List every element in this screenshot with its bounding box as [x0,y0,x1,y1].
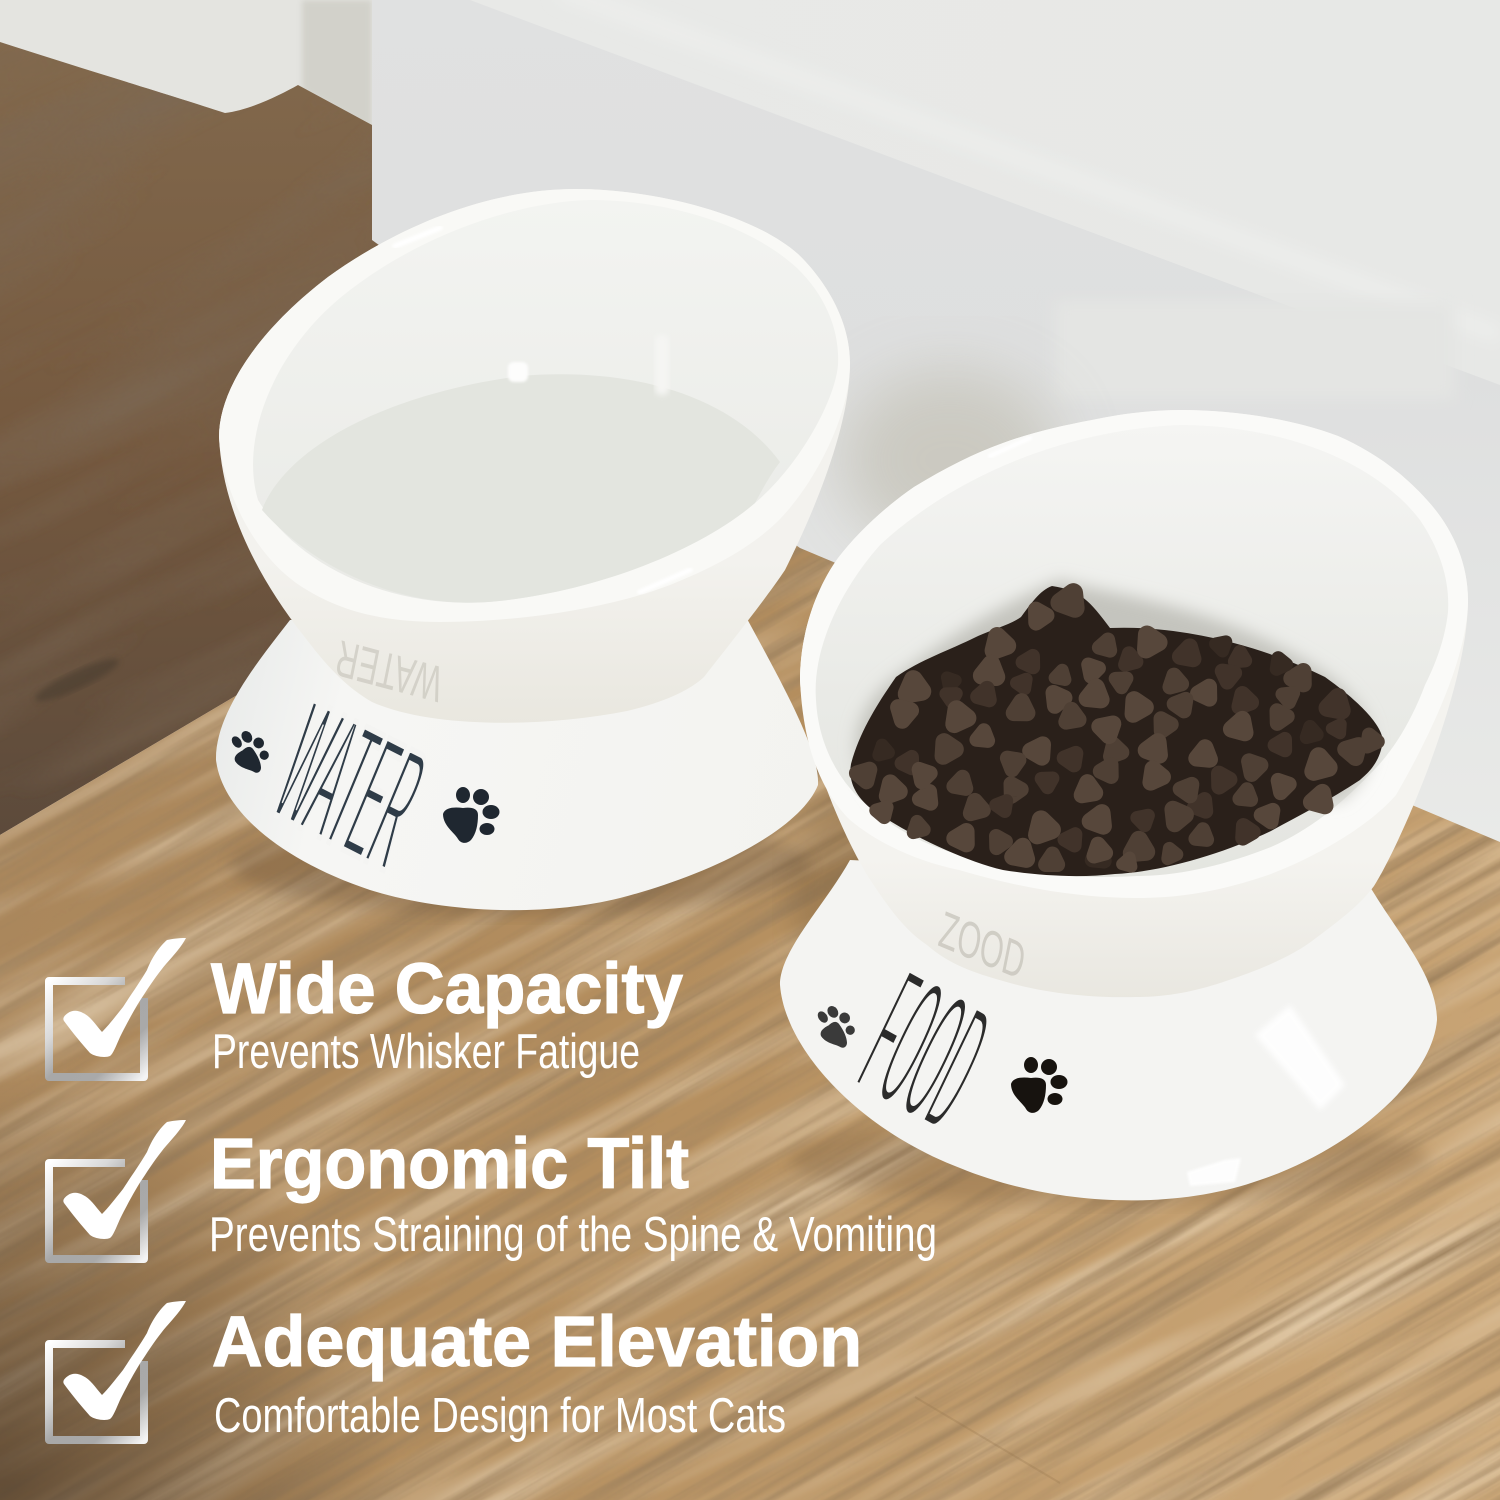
rim highlight [990,438,1030,456]
food bowl body [800,410,1468,997]
water bowl [216,189,850,915]
food bowl base [780,860,1437,1200]
water bowl body [219,189,850,723]
upper dark plank [0,42,379,835]
upper wall above the baseboard [470,0,1500,385]
white wall and baseboard [372,0,1500,842]
ghost label seen through ceramic: WATER [331,629,447,713]
feature: wide capacity [49,938,683,1079]
feature: adequate elevation [49,1301,862,1443]
warm shadow between bowls [840,370,1060,550]
kibble shadow [856,580,1372,800]
window reflection [1255,1005,1345,1110]
lower light planks [0,546,1500,1500]
food bowl rim [800,410,1468,898]
food base label: FOOD [836,933,1015,1169]
ghost label seen through ceramic: ZOOD [935,900,1030,990]
subheading: whisker fatigue: Prevents Whisker Fatigue [212,1025,640,1079]
water base label: WATER [254,666,447,906]
water bowl paw prints [223,724,499,843]
light reflection [508,362,528,382]
icon: check box [49,1301,186,1440]
heading: ergonomic tilt: Ergonomic Tilt [210,1125,689,1204]
water bowl rim [219,189,850,622]
retouched wall patch [1055,300,1455,400]
water bowl interior [253,200,838,603]
icon: check box [49,1120,186,1259]
food bowl [780,410,1468,1205]
heading: wide capacity: Wide Capacity [211,950,683,1029]
feature: ergonomic tilt [49,1120,937,1262]
heading: adequate elevation: Adequate Elevation [212,1303,862,1382]
food bowl paw prints [809,999,1068,1113]
subheading: comfortable design: Comfortable Design for Most Cats [214,1389,786,1443]
food bowl interior [816,425,1448,877]
water surface [262,374,780,603]
subheading: spine and vomiting: Prevents Straining of the Spine & Vomiting [209,1208,937,1262]
feature list [49,938,937,1443]
water bowl shadow [230,815,810,915]
water bowl base [216,615,818,910]
back wall corner [302,0,372,130]
food bowl shadow [790,1115,1430,1205]
kibble pile [850,586,1383,876]
background room [0,0,1500,400]
icon: check box [49,938,186,1077]
